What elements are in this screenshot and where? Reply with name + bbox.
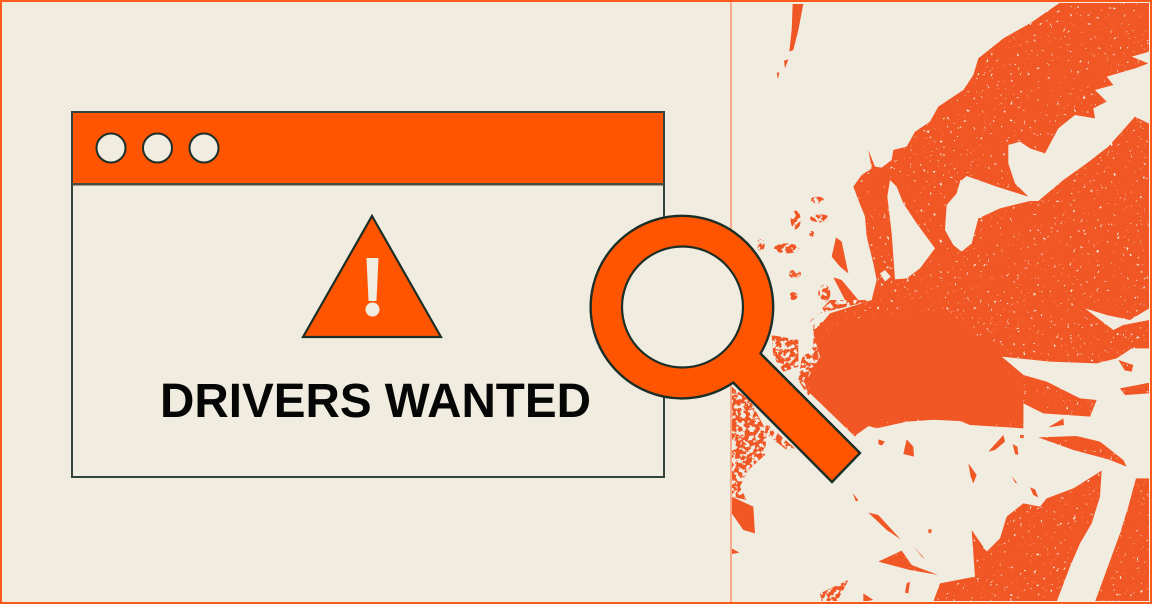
solid core of main landmass <box>810 310 1023 433</box>
browser window <box>72 112 664 477</box>
upper orange fragments <box>777 4 858 300</box>
window title bar <box>73 113 663 184</box>
title bar divider <box>72 183 664 186</box>
icon: warning triangle <box>303 216 441 337</box>
textured orange map artwork <box>732 3 1152 602</box>
vertical divider line <box>730 2 732 602</box>
lower right landmass <box>878 360 1152 602</box>
window control dots <box>96 134 218 162</box>
heading: drivers wanted: DRIVERS WANTED <box>160 375 591 428</box>
small orange fragments <box>732 418 1064 602</box>
icon: magnifying glass <box>591 216 860 482</box>
window body <box>72 112 664 477</box>
main orange landmass <box>805 3 1152 437</box>
speckled orange patches <box>732 170 887 602</box>
